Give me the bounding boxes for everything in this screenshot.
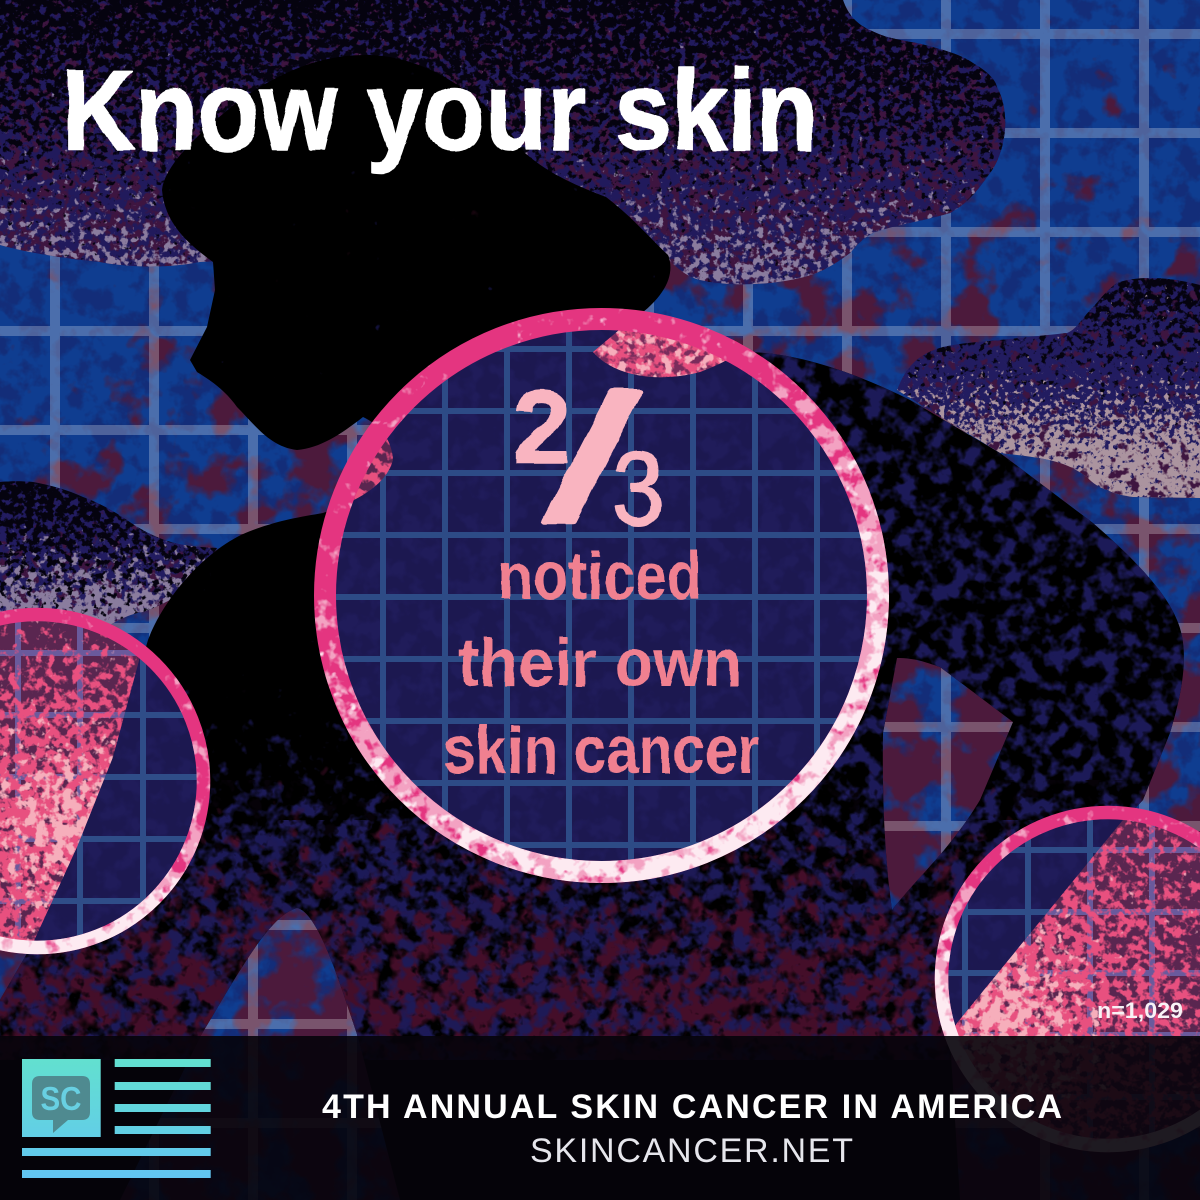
statistic: two thirds <box>513 359 664 558</box>
footer website: SKINCANCER.NET <box>530 1132 853 1170</box>
cloud: top speckled cloud <box>0 0 1006 284</box>
statement: noticed their own skin cancer: their own <box>458 625 742 701</box>
circle: left magnifier lens <box>0 608 210 954</box>
statement: noticed their own skin cancer: noticed <box>498 538 702 614</box>
statement: noticed their own skin cancer: skin cancer <box>443 712 760 788</box>
icon: SkinCancer.net flag logo: SC <box>40 1080 82 1117</box>
footer heading: 4TH ANNUAL SKIN CANCER IN AMERICA <box>322 1088 1062 1126</box>
circle: central magnifier lens <box>314 308 889 883</box>
icon: SkinCancer.net flag logo <box>22 1059 211 1178</box>
circle: right magnifier lens <box>934 806 1200 1152</box>
title: Know your skin <box>62 48 818 175</box>
footer band <box>0 1036 1200 1200</box>
statistic: two thirds: 2 <box>513 370 571 486</box>
cloud: left speckled cloud <box>0 481 217 624</box>
statement: noticed their own skin cancer <box>443 538 760 788</box>
statistic: two thirds: 3 <box>612 430 664 548</box>
sample size note: n=1,029 <box>1097 998 1183 1023</box>
statistic: two thirds: / <box>545 359 640 558</box>
cloud: right speckled cloud <box>897 278 1200 498</box>
